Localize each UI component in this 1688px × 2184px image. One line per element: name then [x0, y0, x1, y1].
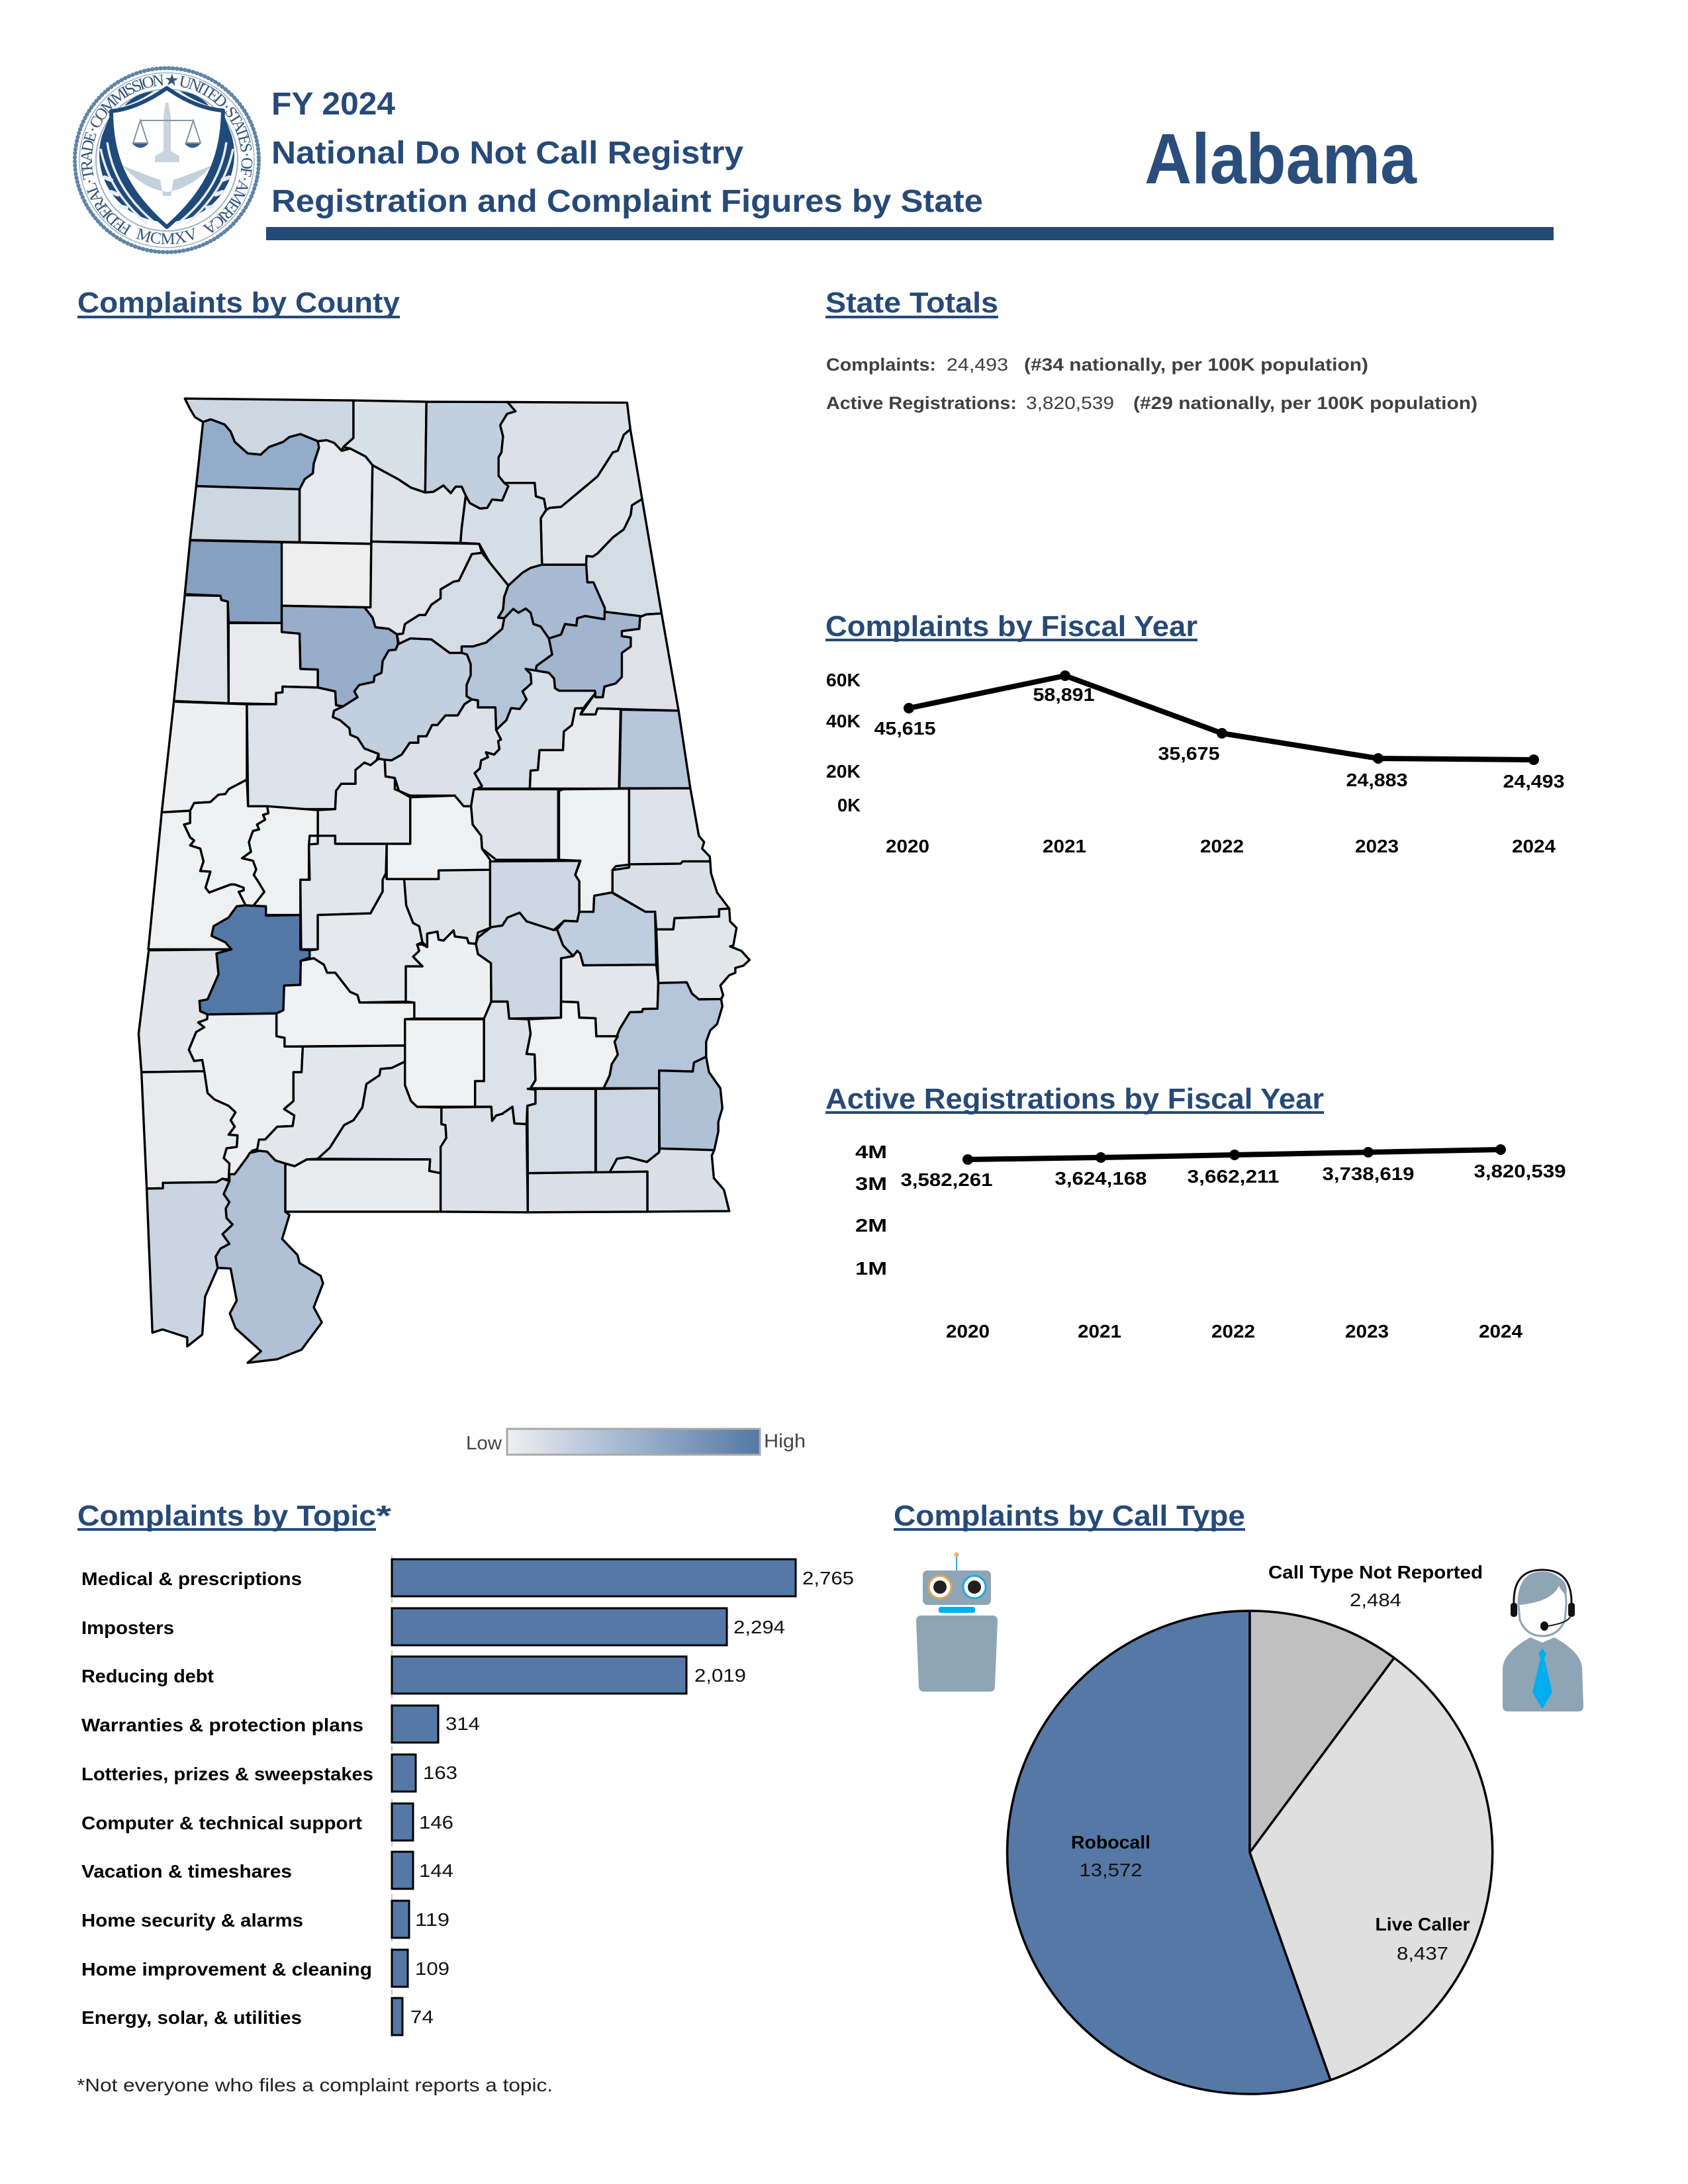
county: Sumter — [148, 811, 246, 949]
county: Chilton — [387, 796, 490, 879]
county: Chambers — [629, 788, 710, 864]
x axis labels: 2022 — [1211, 1321, 1255, 1342]
bar: Reducing debt: 2,019 — [694, 1665, 746, 1686]
county: Lamar — [174, 595, 228, 704]
line chart: complaints by fiscal year — [826, 670, 1565, 856]
county: Elmore — [490, 861, 580, 930]
x axis labels: 2021 — [1043, 836, 1086, 856]
bar: Medical & prescriptions: 2,765 — [802, 1568, 854, 1588]
label: Robocall: 13,572 — [1079, 1860, 1143, 1880]
county: Lauderdale — [185, 398, 353, 455]
y axis labels: 1M — [855, 1258, 887, 1279]
data labels: 3,582,261 — [900, 1169, 993, 1190]
county: Wilcox — [277, 958, 414, 1046]
county: Henry — [659, 1057, 722, 1150]
label: Call Type Not Reported: Call Type Not Reported — [1268, 1562, 1483, 1582]
heading: Complaints by Topic: * — [376, 1500, 392, 1532]
county: Lowndes — [406, 931, 491, 1019]
data labels: 3,738,619 — [1323, 1163, 1414, 1184]
x axis labels: 2023 — [1355, 836, 1399, 856]
data labels: 24,883 — [1346, 770, 1407, 790]
county: Bullock — [561, 951, 658, 1036]
bar: Home security & alarms: Home security & alarms — [81, 1910, 303, 1931]
y axis labels — [826, 670, 861, 815]
county: Pike — [526, 1001, 618, 1088]
bar: Lotteries, prizes & sweepstakes: Lotteries, prizes & sweepstakes — [81, 1764, 373, 1784]
y axis labels: 40K — [826, 711, 861, 731]
bar: Imposters — [81, 1608, 785, 1645]
x axis labels: 2020 — [886, 836, 929, 856]
county: Pickens — [162, 702, 247, 812]
data labels: 3,662,211 — [1188, 1166, 1279, 1187]
x axis labels: 2024 — [1479, 1321, 1523, 1342]
county: Covington — [441, 1107, 528, 1212]
bar: Computer & technical support: Computer & technical support — [81, 1813, 362, 1833]
bar: Energy, solar, & utilities: Energy, solar, & utilities — [81, 2007, 302, 2028]
x axis labels — [886, 836, 1556, 856]
county: Winston — [282, 542, 371, 608]
x axis labels: 2020 — [946, 1321, 990, 1342]
bar: Home improvement & cleaning: Home improvement & cleaning — [81, 1959, 372, 1979]
county: Hale — [242, 806, 318, 915]
state totals text: (#29 nationally, per 100K population) — [1133, 393, 1477, 413]
county: Baldwin — [216, 1151, 323, 1363]
bar: Home security & alarms — [81, 1901, 449, 1938]
y axis labels: 20K — [826, 761, 861, 782]
icon: call center agent — [1503, 1570, 1583, 1711]
x axis labels — [946, 1321, 1523, 1342]
county: Walker — [282, 606, 398, 706]
data labels: 45,615 — [874, 718, 936, 739]
x axis labels: 2024 — [1512, 836, 1556, 856]
county: Macon — [557, 893, 656, 966]
county: Fayette — [228, 623, 318, 704]
county: Etowah — [498, 565, 605, 639]
label: Call Type Not Reported — [1268, 1562, 1483, 1610]
county: Perry — [301, 836, 387, 949]
bar: Medical & prescriptions: Medical & prescriptions — [81, 1569, 302, 1589]
county: Coffee — [528, 1089, 596, 1173]
bar: Vacation & timeshares: Vacation & timeshares — [81, 1861, 292, 1882]
heading: Complaints by Call Type: Complaints by Call Type — [894, 1500, 1245, 1532]
slice: Live Caller — [1250, 1658, 1493, 2080]
county: Bibb — [318, 758, 410, 844]
county: Cleburne — [581, 614, 679, 715]
title: National Do Not Call Registry — [271, 136, 743, 171]
slice: Call Type Not Reported — [1250, 1611, 1394, 1852]
county: Crenshaw — [475, 1001, 536, 1124]
bar: Vacation & timeshares — [81, 1852, 453, 1889]
county: Calhoun — [536, 612, 640, 697]
county: St. Clair — [461, 609, 552, 730]
county: DeKalb — [541, 430, 642, 565]
x axis labels: 2023 — [1345, 1321, 1389, 1342]
bar: Imposters: Imposters — [81, 1617, 174, 1638]
state totals text — [826, 355, 1477, 413]
title: Registration and Complaint Figures by State — [271, 184, 983, 219]
data labels: 24,493 — [1503, 771, 1565, 792]
bar: Reducing debt — [81, 1657, 746, 1694]
label: Robocall: Robocall — [1071, 1832, 1150, 1852]
label: Live Caller: 8,437 — [1397, 1943, 1448, 1964]
county: Tuscaloosa — [247, 686, 379, 809]
bar: Home improvement & cleaning — [81, 1950, 449, 1987]
county: Butler — [405, 1019, 484, 1107]
header rule — [266, 227, 1554, 240]
heading: Complaints by Fiscal Year: Complaints by Fiscal Year — [825, 610, 1197, 643]
heading: Complaints by County: Complaints by County — [77, 287, 400, 319]
bar: Energy, solar, & utilities — [81, 1998, 434, 2035]
y axis labels: 3M — [855, 1173, 887, 1194]
label: Call Type Not Reported: 2,484 — [1350, 1590, 1401, 1610]
label: Live Caller: Live Caller — [1376, 1914, 1470, 1934]
icon: robot — [916, 1553, 998, 1692]
county: Madison — [425, 402, 516, 508]
label: Robocall — [1071, 1832, 1150, 1880]
county: Russell — [656, 909, 749, 999]
bar: Warranties & protection plans: Warranties & protection plans — [81, 1715, 363, 1735]
label: Live Caller — [1376, 1914, 1470, 1964]
county: Cullman — [365, 541, 482, 634]
county: Monroe — [257, 1046, 405, 1166]
state totals text: 3,820,539 — [1026, 393, 1114, 413]
bar chart: complaints by topic — [81, 1555, 854, 2041]
data labels — [900, 1161, 1566, 1190]
slice: Robocall — [1008, 1611, 1331, 2094]
icon: FTC seal: FEDERAL · TRADE · COMMISSION ★ UNITED · STATES · OF · AMERICA — [81, 73, 253, 236]
county: Autauga — [404, 870, 490, 947]
line chart: active registrations by fiscal year — [855, 1142, 1566, 1342]
y axis labels: 4M — [855, 1142, 887, 1162]
county: Geneva — [528, 1171, 647, 1212]
county: Morgan — [371, 465, 466, 543]
title — [271, 87, 983, 219]
county: Limestone — [344, 400, 426, 492]
county: Dallas — [301, 874, 422, 1003]
bar: Lotteries, prizes & sweepstakes — [81, 1754, 457, 1792]
county: Coosa — [471, 790, 558, 860]
bar: Energy, solar, & utilities: 74 — [410, 2007, 434, 2027]
county: Greene — [184, 780, 268, 906]
county: Blount — [397, 553, 508, 653]
state totals text: Active Registrations: — [826, 393, 1017, 413]
heading: Complaints by Topic: Complaints by Topic — [77, 1500, 376, 1532]
state totals text: (#34 nationally, per 100K population) — [1024, 355, 1368, 375]
county: Lawrence — [300, 440, 373, 544]
y axis labels: 0K — [837, 795, 861, 815]
bar: Computer & technical support — [81, 1803, 453, 1841]
data labels: 58,891 — [1033, 684, 1095, 705]
bar: Warranties & protection plans — [81, 1706, 480, 1743]
map legend — [466, 1429, 806, 1455]
county: Clarke — [189, 1013, 303, 1174]
heading: Active Registrations by Fiscal Year: Active Registrations by Fiscal Year — [825, 1083, 1324, 1115]
county: Marion — [185, 540, 282, 623]
heading: State Totals: State Totals — [825, 287, 998, 319]
map legend: High — [764, 1431, 806, 1452]
map legend: Low — [466, 1433, 502, 1454]
county: Colbert — [196, 420, 319, 489]
county: Cherokee — [586, 499, 661, 617]
bar: Lotteries, prizes & sweepstakes: 163 — [423, 1762, 457, 1783]
county: Jefferson — [333, 639, 472, 760]
y axis labels: 2M — [855, 1215, 887, 1236]
county: Talladega — [475, 669, 596, 789]
x axis labels: 2022 — [1200, 836, 1244, 856]
county: Franklin — [190, 486, 300, 542]
county: Tallapoosa — [559, 789, 629, 912]
county: Conecuh — [318, 1062, 446, 1173]
trend line — [962, 1144, 1506, 1165]
state totals text: 24,493 — [947, 355, 1008, 375]
county: Marshall — [461, 483, 546, 586]
state name: Alabama — [1145, 118, 1417, 199]
county: Barbour — [604, 982, 722, 1088]
county: Lee — [612, 862, 729, 929]
county: Dale — [596, 1088, 659, 1172]
county: Clay — [530, 708, 621, 789]
pie chart: complaints by call type — [1008, 1562, 1493, 2094]
data labels — [874, 684, 1565, 792]
bar: Computer & technical support: 146 — [419, 1812, 453, 1833]
data labels: 3,624,168 — [1055, 1168, 1147, 1189]
title: FY 2024 — [271, 87, 395, 122]
county map of Alabama — [138, 398, 749, 1363]
y axis labels — [855, 1142, 887, 1279]
data labels: 35,675 — [1158, 743, 1219, 764]
county: Marengo — [199, 905, 310, 1015]
county: Washington — [142, 1071, 238, 1189]
y axis labels: 60K — [826, 670, 861, 690]
county: Randolph — [620, 709, 690, 788]
bar: Vacation & timeshares: 144 — [419, 1860, 453, 1881]
bar: Warranties & protection plans: 314 — [445, 1713, 480, 1734]
county: Shelby — [385, 700, 501, 806]
x axis labels: 2021 — [1078, 1321, 1121, 1342]
state totals text: Complaints: — [826, 355, 936, 375]
bar: Home security & alarms: 119 — [415, 1909, 449, 1930]
trend line — [904, 670, 1539, 765]
county: Escambia — [285, 1160, 441, 1212]
bar: Reducing debt: Reducing debt — [81, 1666, 214, 1686]
bar: Home improvement & cleaning: 109 — [415, 1958, 449, 1979]
bar: Medical & prescriptions — [81, 1559, 854, 1596]
county: Montgomery — [476, 913, 573, 1019]
data labels: 3,820,539 — [1474, 1161, 1566, 1181]
county: Jackson — [498, 402, 630, 510]
bar: Imposters: 2,294 — [733, 1617, 785, 1637]
county: Mobile — [147, 1179, 232, 1346]
county: Choctaw — [138, 949, 232, 1072]
footnote: *Not everyone who files a complaint reports a topic. — [77, 2075, 553, 2095]
county: Houston — [610, 1148, 729, 1212]
